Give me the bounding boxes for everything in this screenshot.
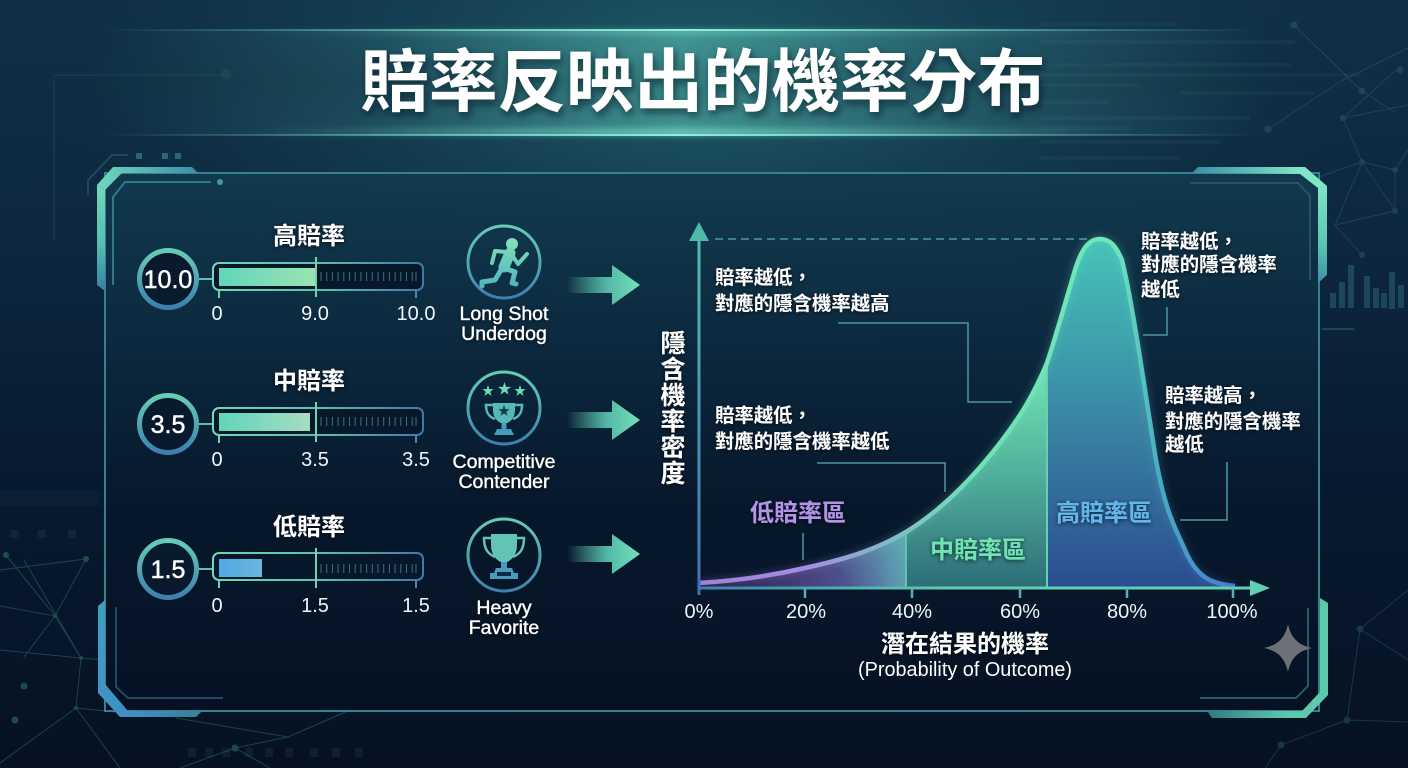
- y axis label: 隱含機率密度: [655, 330, 691, 486]
- faint bars decoration: [0, 265, 1404, 757]
- odds bar: 9.0: [301, 303, 329, 325]
- circuit decoration top left: [54, 69, 231, 240]
- row: low odds: [140, 507, 640, 639]
- x tick labels: 100%: [1206, 601, 1258, 623]
- odds badge 10.0: 10.0: [144, 266, 192, 294]
- label: long shot underdog: Underdog: [461, 323, 547, 345]
- odds badge 3.5: [140, 396, 196, 452]
- annotation: lower odds lower probability: 對應的隱含機率越低: [715, 425, 890, 454]
- odds bar: 3.5: [301, 449, 329, 471]
- label: long shot underdog: Long Shot: [460, 303, 549, 325]
- y axis: [689, 222, 709, 595]
- x axis label: 潛在結果的機率: [881, 624, 1049, 659]
- heading: medium odds: 中賠率: [273, 361, 345, 396]
- odds bar: 10.0: [397, 303, 435, 325]
- annotation: tail: [1165, 379, 1301, 520]
- annotation: peak: [1141, 225, 1277, 335]
- icon: trophy: [468, 519, 540, 591]
- label: heavy favorite: Favorite: [469, 617, 539, 639]
- x tick labels: 60%: [1000, 601, 1040, 623]
- label: competitive contender: Competitive: [453, 451, 555, 473]
- heading: high odds: 高賠率: [273, 216, 345, 251]
- odds badge 1.5: [140, 540, 196, 598]
- distribution curve: [699, 239, 1235, 586]
- title: 賠率反映出的機率分布: [360, 27, 1046, 126]
- arrow: [567, 400, 640, 440]
- annotation: peak: 越低: [1141, 273, 1180, 302]
- x tick labels: [685, 601, 1258, 623]
- network decoration right: [1264, 22, 1408, 768]
- odds bar: 0: [211, 595, 223, 617]
- network decoration left: [0, 552, 350, 768]
- odds bar: [199, 548, 430, 617]
- annotation: peak: 對應的隱含機率: [1141, 248, 1277, 277]
- odds bar: 1.5: [402, 595, 430, 617]
- row: medium odds: [140, 361, 640, 493]
- annotation: tail: 對應的隱含機率: [1165, 405, 1301, 434]
- zone label: medium: 中賠率區: [930, 530, 1026, 565]
- annotation: lower odds higher probability: 對應的隱含機率越高: [715, 287, 890, 316]
- annotation: lower odds lower probability: [715, 399, 945, 492]
- arrow: [567, 534, 640, 574]
- region fills under curve: [699, 235, 1237, 590]
- odds bar: 1.5: [301, 595, 329, 617]
- row: high odds: [140, 216, 640, 345]
- icon: sparkle: [1264, 624, 1312, 672]
- chart: probability distribution: [655, 222, 1301, 681]
- annotation: tail: 越低: [1165, 428, 1204, 457]
- heading: low odds: 低賠率: [273, 507, 345, 542]
- zone label: high: 高賠率區: [1056, 493, 1152, 528]
- odds badge 1.5: 1.5: [151, 556, 185, 584]
- x tick labels: 0%: [685, 601, 714, 623]
- odds bar: 0: [211, 303, 223, 325]
- odds bar: [199, 257, 435, 325]
- icon: runner: [468, 226, 540, 298]
- odds bar: 0: [211, 449, 223, 471]
- x tick labels: 40%: [892, 601, 932, 623]
- label: competitive contender: Contender: [458, 471, 550, 493]
- annotation: peak: 賠率越低，: [1141, 225, 1238, 254]
- odds badge 3.5: 3.5: [151, 411, 185, 439]
- odds badge 10.0: [140, 250, 196, 308]
- peak dashed line: [715, 238, 1088, 240]
- faint code lines: [1040, 22, 1360, 160]
- annotation: lower odds higher probability: 賠率越低，: [715, 261, 812, 290]
- arrow: [567, 265, 640, 305]
- zone label: low: 低賠率區: [750, 493, 846, 528]
- low zone leader: [802, 533, 804, 560]
- x tick labels: 80%: [1107, 601, 1147, 623]
- odds bar: 3.5: [402, 449, 430, 471]
- annotation: lower odds lower probability: 賠率越低，: [715, 399, 812, 428]
- x tick labels: 20%: [786, 601, 826, 623]
- annotation: lower odds higher probability: [715, 261, 1012, 402]
- icon: trophy with stars: [468, 372, 540, 444]
- label: heavy favorite: Heavy: [476, 597, 532, 619]
- annotation: tail: 賠率越高，: [1165, 379, 1262, 408]
- x axis: [699, 580, 1270, 598]
- title band: [100, 29, 1260, 136]
- odds bar: [199, 402, 430, 471]
- panel: main frame: [88, 153, 1328, 718]
- x axis sublabel: (Probability of Outcome): [858, 659, 1072, 681]
